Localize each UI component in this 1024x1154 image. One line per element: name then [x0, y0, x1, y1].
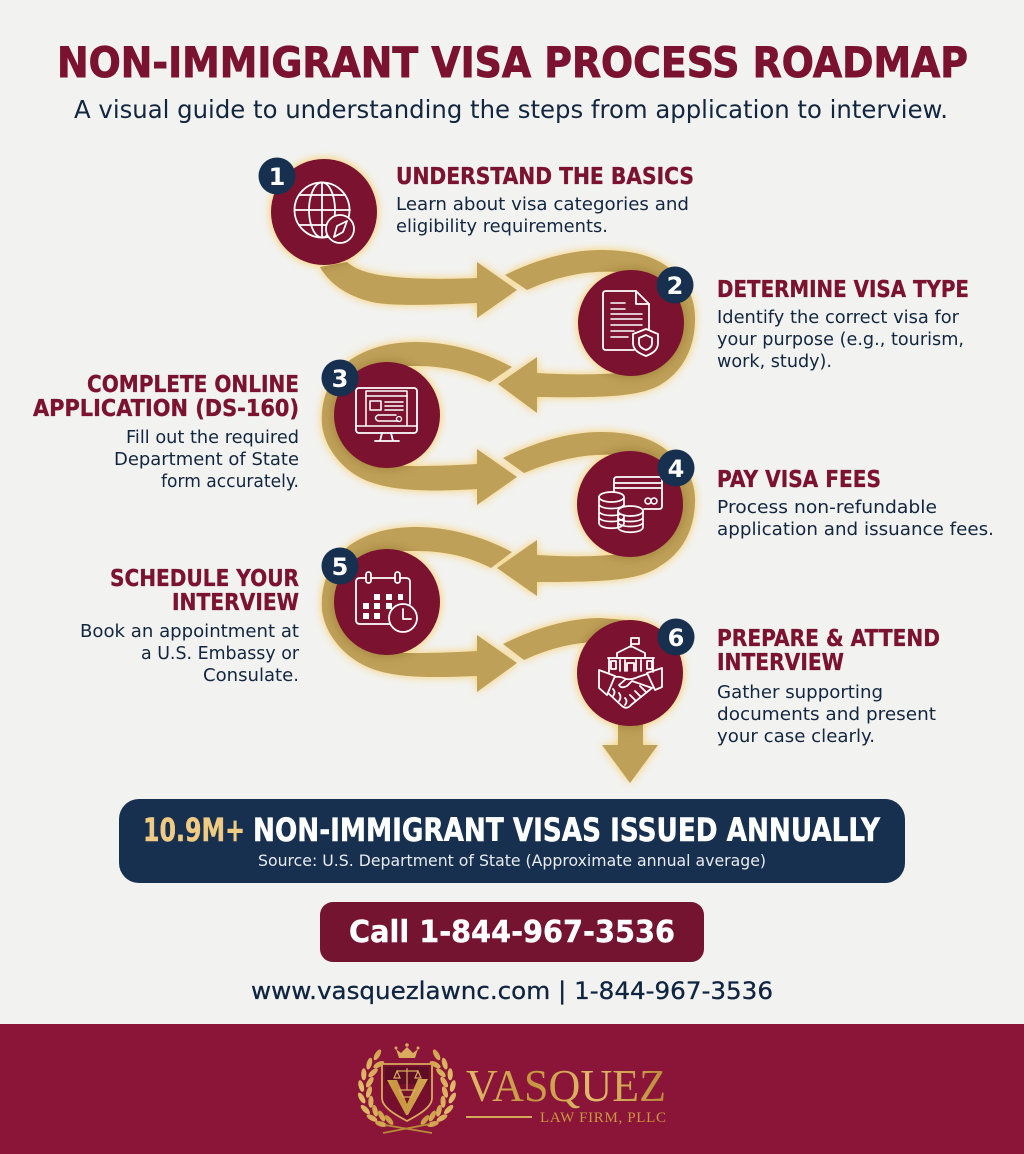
contact line: www.vasquezlawnc.com | 1-844-967-3536 — [251, 977, 773, 1005]
ribbon shading near circles — [320, 262, 688, 730]
step 2 — [578, 266, 969, 376]
step 5 text — [80, 622, 300, 686]
step 5 text: Consulate. — [203, 666, 299, 686]
step 4 — [577, 450, 994, 557]
step 1 text — [396, 195, 689, 237]
step 1 — [258, 158, 694, 265]
scales and urn — [394, 1068, 421, 1097]
step 3 heading — [33, 372, 299, 422]
icon: embassy with handshake — [599, 638, 662, 708]
arrow: down to banner — [602, 715, 658, 783]
statistic label: NON-IMMIGRANT VISAS ISSUED ANNUALLY — [253, 811, 881, 849]
subtitle: A visual guide to understanding the steps from application to interview. — [74, 95, 948, 124]
logo: rule — [466, 1116, 532, 1118]
V monogram — [387, 1079, 428, 1115]
logo: firm name: VASQUEZ — [466, 1060, 666, 1111]
footer band — [0, 1024, 1024, 1154]
step 6 text: documents and present — [717, 705, 936, 725]
roadmap ribbon arrows — [320, 250, 695, 783]
step 3 badge: 3 — [332, 365, 348, 393]
icon: document with shield — [603, 291, 658, 356]
step 1 heading: UNDERSTAND THE BASICS — [396, 164, 694, 190]
step 1 text: Learn about visa categories and — [396, 195, 689, 215]
step 5 heading — [110, 566, 299, 616]
arrow: step 2 to 3 — [498, 250, 695, 413]
step 6 badge: 6 — [668, 624, 684, 652]
step 2 circle — [578, 270, 684, 376]
step 1 badge — [258, 158, 296, 194]
wreath: left branch — [356, 1048, 395, 1128]
step 6 heading — [717, 626, 940, 676]
step 6 badge — [658, 618, 694, 656]
crown — [394, 1043, 420, 1058]
step 6 text: Gather supporting — [717, 683, 883, 703]
step 6 — [577, 618, 940, 747]
statistic value: 10.9M+ — [143, 811, 245, 849]
step 6 heading: INTERVIEW — [717, 650, 844, 676]
step 1 badge: 1 — [269, 163, 285, 191]
step 6 circle — [577, 620, 683, 726]
step 4 text — [717, 498, 994, 540]
step 4 badge — [658, 450, 694, 486]
step 1 circle — [271, 159, 377, 265]
step 2 badge — [656, 266, 694, 304]
step 6 heading: PREPARE & ATTEND — [717, 626, 940, 652]
step 5 heading: INTERVIEW — [172, 590, 299, 616]
step circle halos — [270, 158, 685, 727]
step 3 text: Fill out the required — [126, 428, 299, 448]
step 1 text: eligibility requirements. — [396, 217, 608, 237]
step 3 heading: COMPLETE ONLINE — [87, 372, 299, 398]
icon: computer monitor with form — [356, 388, 417, 441]
step 3 text — [114, 428, 299, 492]
step 5 — [80, 548, 440, 686]
step 4 text: Process non-refundable — [717, 498, 937, 518]
icon: globe with compass — [294, 182, 354, 243]
step 5 heading: SCHEDULE YOUR — [110, 566, 299, 592]
step 6 text: your case clearly. — [717, 727, 875, 747]
shield — [382, 1064, 432, 1121]
step 3 — [33, 360, 440, 492]
step 2 heading: DETERMINE VISA TYPE — [717, 277, 969, 303]
step 3 heading: APPLICATION (DS-160) — [33, 396, 299, 422]
step 2 badge: 2 — [667, 272, 683, 300]
wreath: right branch — [419, 1048, 458, 1128]
source note: Source: U.S. Department of State (Approximate annual average) — [258, 851, 766, 870]
step 3 text: form accurately. — [161, 472, 299, 492]
step 5 badge — [322, 548, 358, 584]
step 3 circle — [334, 362, 440, 468]
logo: crest — [356, 1043, 458, 1133]
step 4 circle — [577, 451, 683, 557]
step 2 text: work, study). — [717, 352, 832, 372]
arrow: step 4 to 5 — [497, 432, 695, 596]
arrow: step 6 ribbon tail — [503, 618, 625, 660]
arrow: step 5 to 6 — [322, 527, 517, 692]
step 2 text: your purpose (e.g., tourism, — [717, 330, 964, 350]
step 3 badge — [322, 360, 358, 396]
step 4 text: application and issuance fees. — [717, 520, 994, 540]
arrow: step 1 to 2 — [320, 262, 517, 318]
step 2 text: Identify the correct visa for — [717, 308, 960, 328]
logo: firm suffix: LAW FIRM, PLLC — [540, 1110, 666, 1126]
step 2 text — [717, 308, 964, 372]
call button: Call 1-844-967-3536 — [349, 915, 675, 950]
step 4 badge: 4 — [668, 455, 684, 483]
wreath: stems — [383, 1124, 432, 1133]
call button — [320, 902, 704, 962]
icon: calendar with clock — [356, 572, 417, 632]
step 5 circle — [334, 549, 440, 655]
step 6 text — [717, 683, 936, 747]
step 5 text: a U.S. Embassy or — [141, 644, 300, 664]
step 4 heading: PAY VISA FEES — [717, 467, 881, 493]
icon: credit card and coins — [599, 477, 662, 532]
statistic banner — [119, 799, 905, 883]
step 3 text: Department of State — [114, 450, 299, 470]
step 5 text: Book an appointment at — [80, 622, 299, 642]
arrow: step 3 to 4 — [322, 342, 517, 505]
step 5 badge: 5 — [332, 553, 348, 581]
